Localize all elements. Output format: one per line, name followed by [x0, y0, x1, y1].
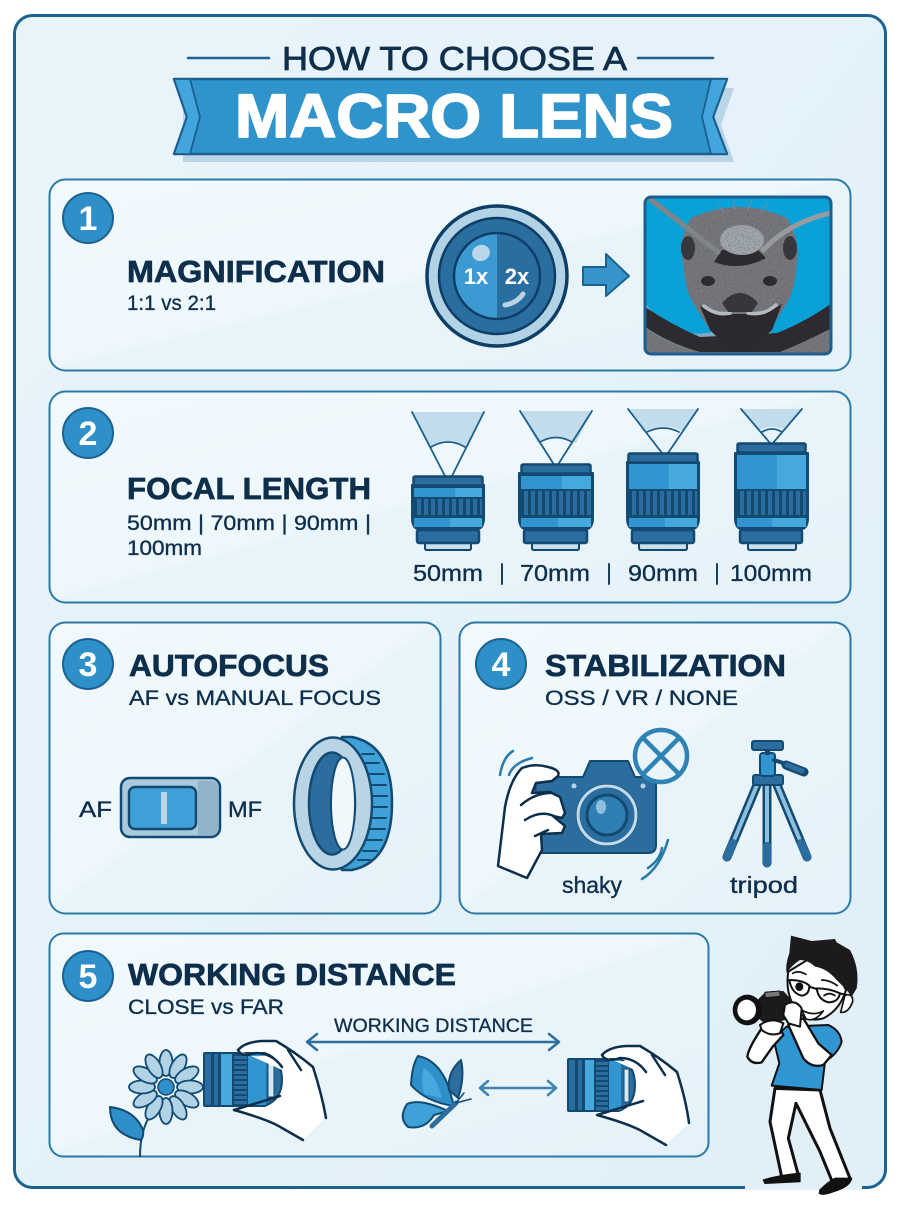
arrow [583, 254, 629, 296]
focal length labels: 50mm [413, 560, 483, 586]
camera [758, 991, 792, 1025]
glasses [789, 980, 846, 1002]
long arrow [307, 1034, 559, 1050]
wink [824, 994, 835, 996]
badge 4: 4 [492, 646, 511, 684]
title rule left [188, 57, 269, 59]
hands [760, 1002, 802, 1034]
lens 70mm [519, 411, 593, 550]
subheading: AF vs MANUAL FOCUS [129, 687, 381, 710]
tripod label: tripod [730, 872, 798, 898]
badge 1 [63, 193, 113, 243]
shake marks [500, 751, 668, 879]
heading: FOCAL LENGTH [127, 471, 371, 506]
subheading: CLOSE vs FAR [128, 996, 284, 1019]
panel 3: autofocus [50, 622, 440, 914]
right arm [788, 1018, 832, 1066]
panel background [460, 622, 850, 914]
panel background [50, 180, 850, 370]
panel background [50, 934, 708, 1156]
panel background [50, 622, 440, 914]
hand [498, 765, 565, 878]
hair [786, 936, 857, 997]
panel background [50, 392, 850, 602]
icon: butterfly [403, 1056, 471, 1128]
lens 90mm [627, 409, 699, 550]
lens 100mm [735, 409, 808, 550]
heading: WORKING DISTANCE [128, 957, 456, 992]
icon: lens front 1x 2x: 1x [464, 264, 489, 289]
eye [795, 982, 803, 991]
short arrow [480, 1081, 556, 1095]
panel 1: magnification [50, 180, 850, 370]
icon: focus ring [294, 737, 392, 870]
banner right fold [702, 79, 727, 154]
heading: AUTOFOCUS [129, 648, 329, 683]
banner left fold [174, 79, 200, 154]
banner ribbon [174, 79, 727, 154]
subheading [127, 512, 371, 560]
hand with lens, close [203, 1041, 326, 1140]
badge 2: 2 [79, 415, 97, 453]
banner shadow [183, 88, 734, 162]
subheading: 1:1 vs 2:1 [127, 292, 216, 315]
legs [770, 1088, 850, 1188]
icon: lens front 1x 2x: 2x [505, 264, 530, 289]
heading: MAGNIFICATION [127, 254, 385, 289]
working distance label: WORKING DISTANCE [334, 1016, 533, 1037]
subheading: 50mm | 70mm | 90mm | [127, 512, 371, 535]
AF label: AF [79, 797, 112, 822]
badge 3: 3 [79, 646, 97, 684]
subheading: 100mm [127, 537, 202, 560]
neck and face [787, 958, 846, 1020]
panel 2: focal length [50, 392, 850, 602]
focal length labels [413, 560, 812, 586]
subheading: OSS / VR / NONE [545, 687, 738, 710]
title line 1: HOW TO CHOOSE A [282, 40, 627, 77]
banner title: MACRO LENS [235, 82, 673, 150]
icon: flower [110, 1050, 203, 1156]
white base patch over frame [745, 1186, 862, 1190]
badge 3 [63, 639, 113, 689]
icon: lens front 1x 2x [427, 206, 567, 346]
ear [841, 995, 853, 1012]
shaky label: shaky [562, 872, 622, 898]
eyebrows [793, 972, 837, 986]
shirt [772, 1025, 842, 1090]
no symbol [635, 730, 687, 782]
photo: ant macro [644, 196, 832, 355]
title rule right [638, 57, 713, 59]
focal length labels: 90mm [628, 560, 698, 586]
heading: STABILIZATION [545, 648, 786, 683]
badge 5: 5 [79, 958, 97, 996]
focal length labels: 70mm [520, 560, 590, 586]
badge 2 [63, 408, 113, 458]
title block [174, 40, 734, 162]
MF label: MF [228, 797, 262, 822]
badge 1: 1 [79, 200, 97, 238]
panel 4: stabilization [460, 622, 850, 914]
focal length labels: 100mm [730, 560, 812, 586]
shoes [763, 1173, 852, 1194]
badge 5 [63, 951, 113, 1001]
panel 5: working distance [50, 934, 708, 1156]
icon: tripod [727, 741, 807, 863]
left arm [747, 1022, 783, 1063]
photographer character [733, 936, 862, 1194]
icon: camera handheld [498, 730, 687, 879]
badge 4 [476, 639, 526, 689]
smile [802, 1010, 823, 1020]
AF/MF switch [121, 778, 220, 837]
lens 50mm [412, 412, 484, 550]
hand with lens, far [567, 1046, 689, 1145]
